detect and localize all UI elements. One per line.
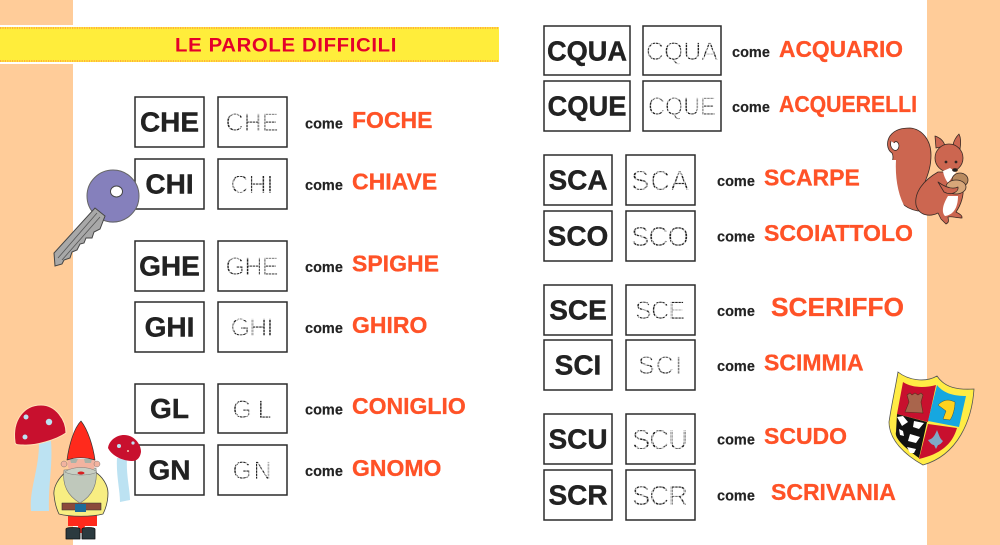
row: CHE: FOCHE (352, 107, 432, 133)
row: CHE: CHE (140, 106, 199, 138)
row: SCI: SCIMMIA (764, 350, 864, 376)
row: SCI: SCI (638, 352, 682, 380)
row: GHI: GHI (145, 312, 194, 342)
row: SCE: come (717, 304, 755, 320)
row: GL: GL (232, 396, 272, 424)
title band (0, 27, 499, 62)
row: CHE (135, 97, 432, 147)
row: CQUE: ACQUERELLI (779, 91, 917, 117)
row: GHI: GHIRO (352, 312, 427, 338)
row: CQUA: ACQUARIO (779, 36, 903, 62)
row: SCI: come (717, 359, 755, 375)
icon: squirrel (888, 128, 968, 224)
row: SCE (544, 285, 904, 335)
row: GHE: SPIGHE (352, 250, 439, 276)
row: SCO: come (717, 230, 755, 246)
row: SCE: SCE (635, 297, 685, 325)
row: GN: GNOMO (352, 455, 441, 481)
row: GL: CONIGLIO (352, 393, 466, 419)
row: CHE: CHE (226, 109, 278, 137)
row: GN: come (305, 464, 343, 480)
row: SCA: SCA (548, 164, 608, 196)
row: SCE: SCERIFFO (771, 292, 904, 322)
row: SCI (544, 340, 864, 390)
icon: gnome (54, 421, 108, 539)
icon: shield (889, 372, 974, 465)
row: CHI: come (305, 178, 343, 194)
row: SCO (544, 211, 913, 261)
row: GN (135, 445, 441, 495)
row: CHI: CHIAVE (352, 168, 437, 194)
row: CQUE: CQUE (648, 93, 716, 121)
row: CHE: come (305, 116, 343, 132)
row: SCI: SCI (555, 350, 601, 380)
row: CQUA: CQUA (646, 38, 718, 66)
row: CQUA (544, 26, 903, 75)
row: GL (135, 384, 466, 433)
row: GN: GN (148, 454, 190, 486)
row: GHI: come (305, 321, 343, 337)
row: SCO: SCO (631, 221, 689, 252)
row: GN: GN (232, 457, 272, 485)
row: CHI (135, 159, 437, 209)
row: SCR: SCR (548, 480, 608, 510)
row: SCR: SCRIVANIA (771, 479, 896, 505)
row: GHE: GHE (226, 253, 278, 281)
row: GL: GL (150, 393, 189, 424)
icon: key (54, 170, 139, 266)
row: SCU: SCUDO (764, 423, 847, 449)
row: SCO: SCO (548, 220, 608, 252)
row: GHI: GHI (230, 314, 274, 342)
row: SCA: come (717, 174, 755, 190)
row: GL: come (305, 402, 343, 418)
row: CHI: CHI (230, 171, 274, 199)
panel: left peach margin (0, 0, 73, 545)
row: SCR: come (717, 488, 755, 504)
row: CHI: CHI (145, 168, 194, 200)
row: CQUE (544, 81, 917, 131)
icon: big mushroom (15, 405, 66, 511)
row: GHE: GHE (139, 250, 200, 282)
row: SCA: SCARPE (764, 164, 860, 190)
row: SCR (544, 470, 896, 520)
icon: small mushroom (108, 435, 141, 502)
row: CQUE: CQUE (548, 90, 626, 122)
row: SCU: SCU (632, 424, 688, 455)
row: SCR: SCR (632, 480, 688, 511)
row: SCA: SCA (631, 165, 690, 196)
row: CQUA: CQUA (547, 36, 627, 66)
row: GHI (135, 302, 427, 352)
row: SCU: come (717, 432, 755, 448)
row: SCO: SCOIATTOLO (764, 220, 913, 246)
row: CQUE: come (732, 100, 770, 116)
title: LE PAROLE DIFFICILI (175, 36, 397, 56)
row: GHE (135, 241, 439, 291)
row: CQUA: come (732, 45, 770, 61)
row: SCE: SCE (549, 294, 607, 326)
row: SCU (544, 414, 847, 464)
row: SCA (544, 155, 860, 205)
panel: right peach margin (927, 0, 1000, 545)
row: GHE: come (305, 260, 343, 276)
row: SCU: SCU (548, 424, 608, 454)
